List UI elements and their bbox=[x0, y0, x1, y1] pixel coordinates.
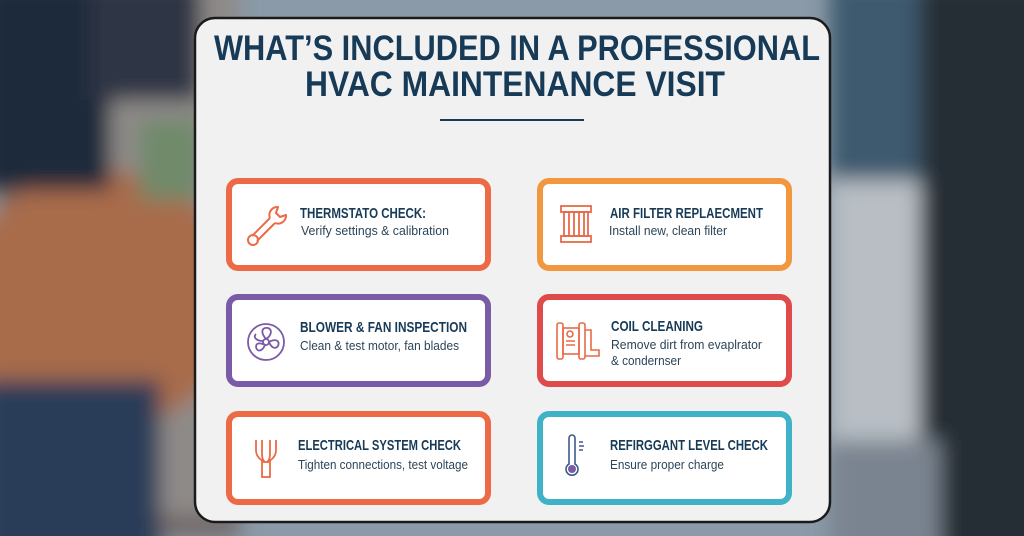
card: electrical: Tighten connections, test voltage bbox=[298, 457, 468, 472]
icon: coil bbox=[557, 323, 599, 359]
card: air filter bbox=[540, 181, 789, 268]
card: electrical bbox=[229, 414, 488, 502]
card: air filter: Install new, clean filter bbox=[609, 223, 728, 238]
card: blower: BLOWER & FAN INSPECTION bbox=[300, 319, 467, 336]
icon: wires bbox=[256, 440, 276, 477]
title bbox=[214, 29, 820, 104]
card: coil cleaning: COIL CLEANING bbox=[611, 318, 703, 335]
title: WHAT’S INCLUDED IN A PROFESSIONAL bbox=[214, 29, 820, 68]
card: coil cleaning bbox=[540, 297, 789, 384]
card: coil cleaning: & condernser bbox=[611, 353, 682, 368]
main panel bbox=[195, 18, 830, 522]
icon: filter bbox=[561, 206, 591, 242]
title: HVAC MAINTENANCE VISIT bbox=[305, 65, 725, 104]
card: electrical: ELECTRICAL SYSTEM CHECK bbox=[298, 437, 461, 454]
card: refrigerant bbox=[540, 414, 789, 502]
card: coil cleaning: Remove dirt from evaplrator bbox=[611, 337, 763, 352]
icon: wrench bbox=[248, 207, 286, 245]
card: thermostat check: Verify settings & calibration bbox=[301, 223, 449, 238]
card: thermostat check: THERMSTATO CHECK: bbox=[300, 205, 426, 222]
card: blower bbox=[229, 297, 488, 384]
card: refrigerant: Ensure proper charge bbox=[610, 457, 724, 472]
card: air filter: AIR FILTER REPLAECMENT bbox=[610, 205, 763, 222]
card: blower: Clean & test motor, fan blades bbox=[300, 338, 459, 353]
icon: fan bbox=[248, 324, 284, 360]
card: thermostat check bbox=[229, 181, 488, 268]
card: refrigerant: REFIRGGANT LEVEL CHECK bbox=[610, 437, 768, 454]
icon: thermometer bbox=[566, 435, 584, 475]
